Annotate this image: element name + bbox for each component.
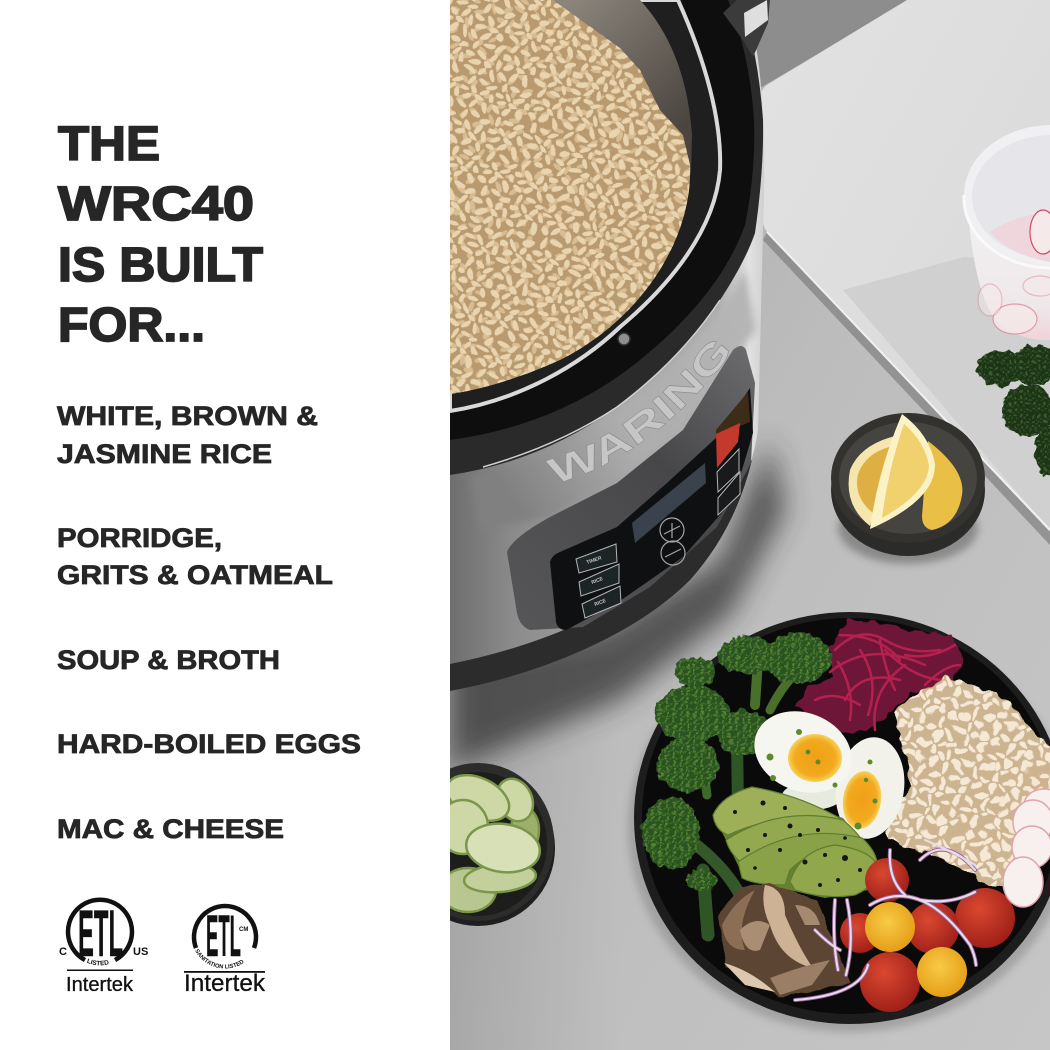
food bowl	[628, 612, 1050, 1032]
display screen	[632, 463, 706, 543]
title: FOR...	[58, 299, 205, 352]
broccoli on board	[976, 345, 1050, 476]
title: THE	[58, 118, 160, 171]
cooker body	[450, 49, 764, 664]
control panel housing	[507, 346, 755, 630]
silver shoulder band	[506, 272, 758, 522]
icon: ETL sanitation listed mark: Intertek	[184, 970, 266, 997]
icon: ETL listed mark: Intertek	[66, 974, 134, 996]
rice cooker	[450, 0, 770, 691]
black control panel	[550, 388, 753, 630]
icon: ETL listed mark: C	[59, 946, 67, 958]
title: WRC40	[58, 178, 254, 231]
dark counter corner at top	[756, 0, 907, 88]
black control panel: RICE	[594, 598, 608, 608]
white cutting board	[760, 0, 1050, 545]
red onion	[795, 840, 976, 1000]
mushrooms	[718, 883, 850, 997]
black control panel: RICE	[591, 576, 605, 586]
title: IS BUILT	[58, 239, 263, 292]
inner pot wall	[553, 0, 692, 170]
top handle	[723, 0, 770, 57]
icon: ETL sanitation listed mark: SANITATION LISTED	[196, 949, 244, 968]
rice and timer buttons	[576, 544, 621, 618]
brown rice	[885, 674, 1050, 886]
list of foods: MAC & CHEESE	[57, 814, 284, 844]
title	[58, 118, 263, 352]
list of foods: PORRIDGE,	[57, 523, 222, 553]
list of foods: HARD-BOILED EGGS	[57, 729, 361, 759]
icon: ETL listed mark	[59, 896, 148, 996]
side buttons	[717, 449, 740, 515]
embossed WARING logo: WARING	[546, 341, 729, 482]
rim screw	[618, 333, 630, 345]
radish slices	[978, 210, 1050, 334]
cooker base	[450, 460, 752, 691]
list of foods: SOUP & BROTH	[57, 645, 280, 675]
plastic container with radish	[964, 125, 1050, 340]
panel: text column	[56, 118, 361, 997]
plus and minus buttons	[660, 518, 685, 565]
cucumber bowl	[450, 763, 555, 926]
cooked brown rice	[450, 0, 690, 394]
list of foods: JASMINE RICE	[57, 439, 272, 469]
icon: ETL sanitation listed mark	[184, 904, 266, 997]
list of foods: GRITS & OATMEAL	[57, 560, 333, 590]
cooker floor shadow	[450, 440, 785, 770]
icon: ETL listed mark: ETL	[78, 896, 123, 970]
lemon bowl	[831, 413, 985, 564]
icon: ETL sanitation listed mark: CM	[239, 927, 248, 933]
broccoli	[642, 633, 831, 935]
boiled eggs	[754, 711, 904, 839]
amber panel reflection	[716, 392, 750, 436]
red cabbage	[797, 620, 963, 733]
avocado slices	[713, 787, 877, 898]
black rim	[450, 0, 763, 475]
black control panel: TIMER	[586, 555, 603, 566]
list of foods	[57, 401, 361, 844]
panel: product photo	[450, 0, 1050, 1050]
roasted tomatoes	[840, 858, 1015, 1012]
radish slices	[1003, 789, 1050, 907]
silver trim ring	[450, 0, 720, 411]
list of foods: WHITE, BROWN &	[57, 401, 318, 431]
steel countertop	[450, 0, 1050, 1050]
icon: ETL listed mark: LISTED	[86, 958, 108, 966]
icon: ETL listed mark: US	[133, 946, 148, 958]
lemon wedges	[922, 441, 962, 530]
icon: ETL sanitation listed mark: ETL	[206, 904, 241, 969]
red cook button	[716, 423, 740, 468]
